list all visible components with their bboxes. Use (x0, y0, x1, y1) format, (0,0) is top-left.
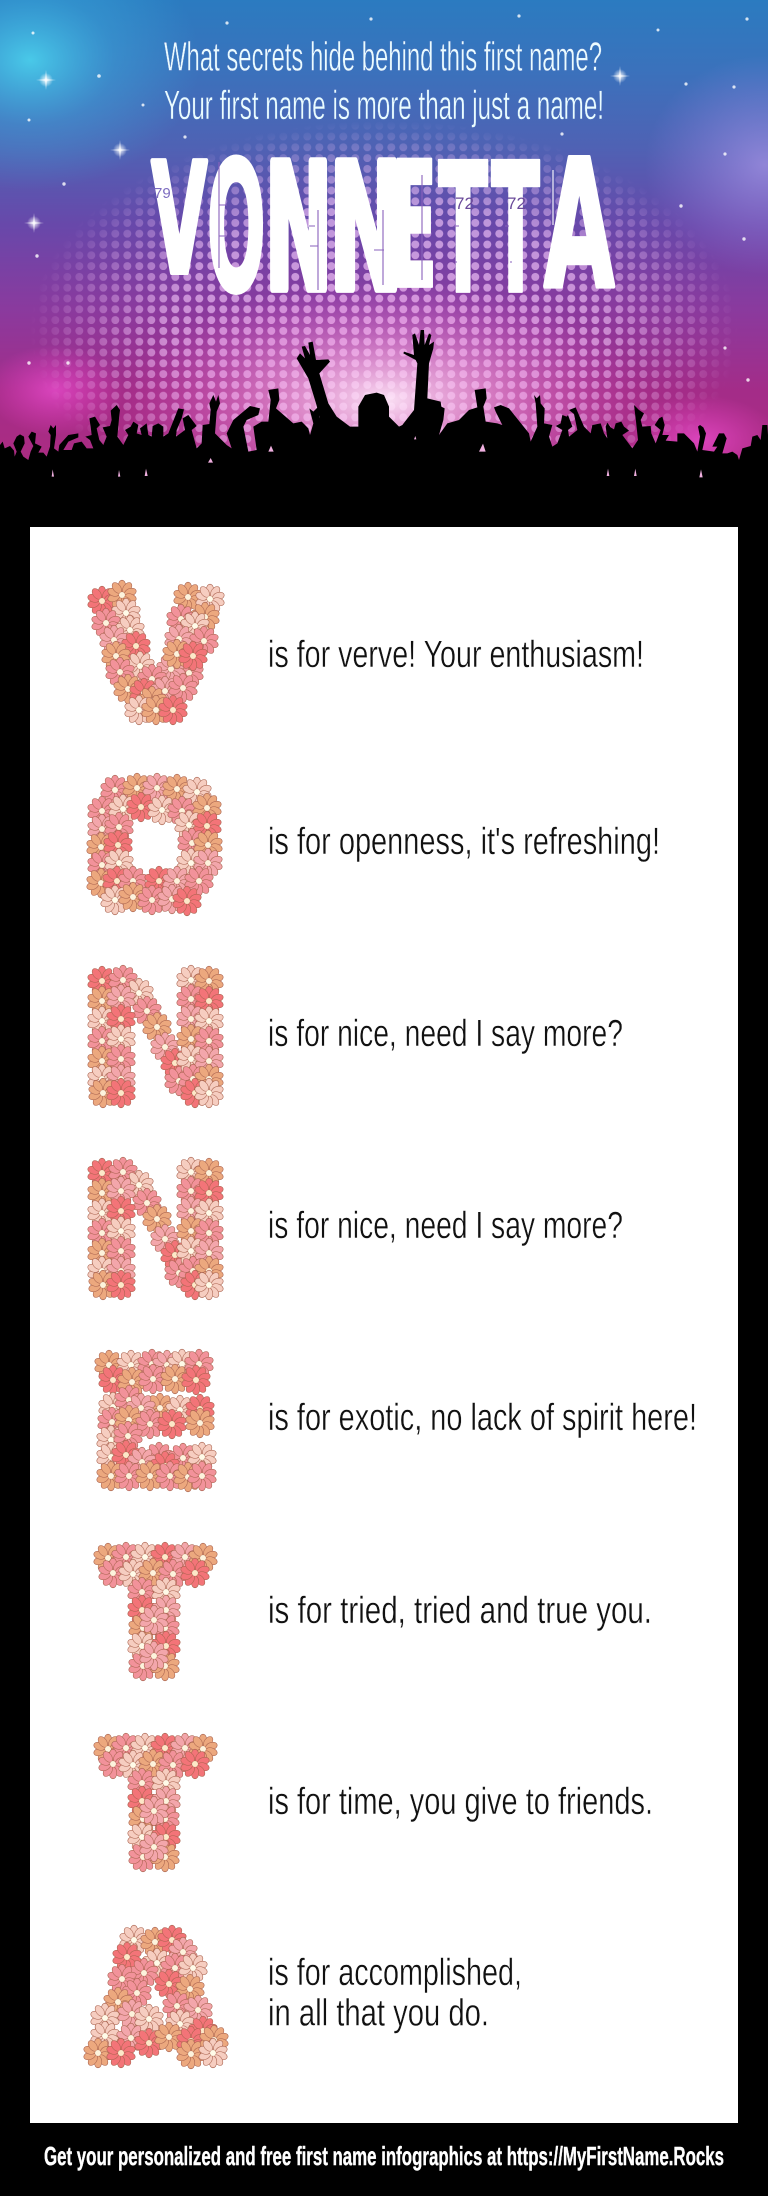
title: name VONNETTA: T (491, 126, 540, 335)
row: O (86, 773, 660, 916)
sparkles (24, 14, 750, 382)
row: N (87, 965, 623, 1108)
crowd silhouette (0, 330, 768, 527)
flower letter A (83, 1925, 229, 2069)
text: accomplished: is for accomplished, (268, 1952, 522, 1994)
title: name VONNETTA: O (206, 122, 266, 335)
text: accomplished: in all that you do. (268, 1992, 489, 2034)
title: name VONNETTA (152, 122, 614, 335)
text: accomplished (268, 1952, 522, 2034)
text: tried: is for tried, tried and true you. (268, 1590, 652, 1632)
flower letter N (87, 965, 224, 1108)
title: tagline (164, 34, 604, 128)
row: A (83, 1925, 522, 2069)
flower letter E (94, 1349, 217, 1492)
flower letter N (87, 1157, 224, 1300)
flower letter O (86, 773, 223, 916)
row: T second (93, 1733, 653, 1872)
row: N second (87, 1157, 623, 1300)
row: E (94, 1349, 697, 1492)
text: time: is for time, you give to friends. (268, 1781, 653, 1823)
grunge marks on name (154, 162, 553, 290)
title: name VONNETTA: N (265, 128, 332, 331)
text: nice: is for nice, need I say more? (268, 1205, 623, 1247)
flower letter V (87, 580, 225, 725)
header stage background (0, 0, 768, 460)
title: name VONNETTA: V (152, 133, 207, 309)
title: name VONNETTA: E (391, 126, 437, 329)
flower letter T (93, 1733, 218, 1872)
white content panel (30, 527, 738, 2123)
flower letter T (93, 1542, 218, 1681)
text: openness: is for openness, it's refreshing! (268, 821, 660, 863)
title: name VONNETTA: T (438, 125, 488, 335)
grunge marks on name: 72 (507, 194, 526, 213)
text: verve: is for verve! Your enthusiasm! (268, 634, 644, 676)
text: nice: is for nice, need I say more? (268, 1013, 623, 1055)
grunge marks on name: 79 (154, 185, 171, 202)
title: name VONNETTA: N (329, 127, 403, 330)
row: V (87, 580, 644, 725)
title: name VONNETTA: A (544, 124, 614, 329)
row: T (93, 1542, 652, 1681)
grunge marks on name: 72 (455, 194, 474, 213)
